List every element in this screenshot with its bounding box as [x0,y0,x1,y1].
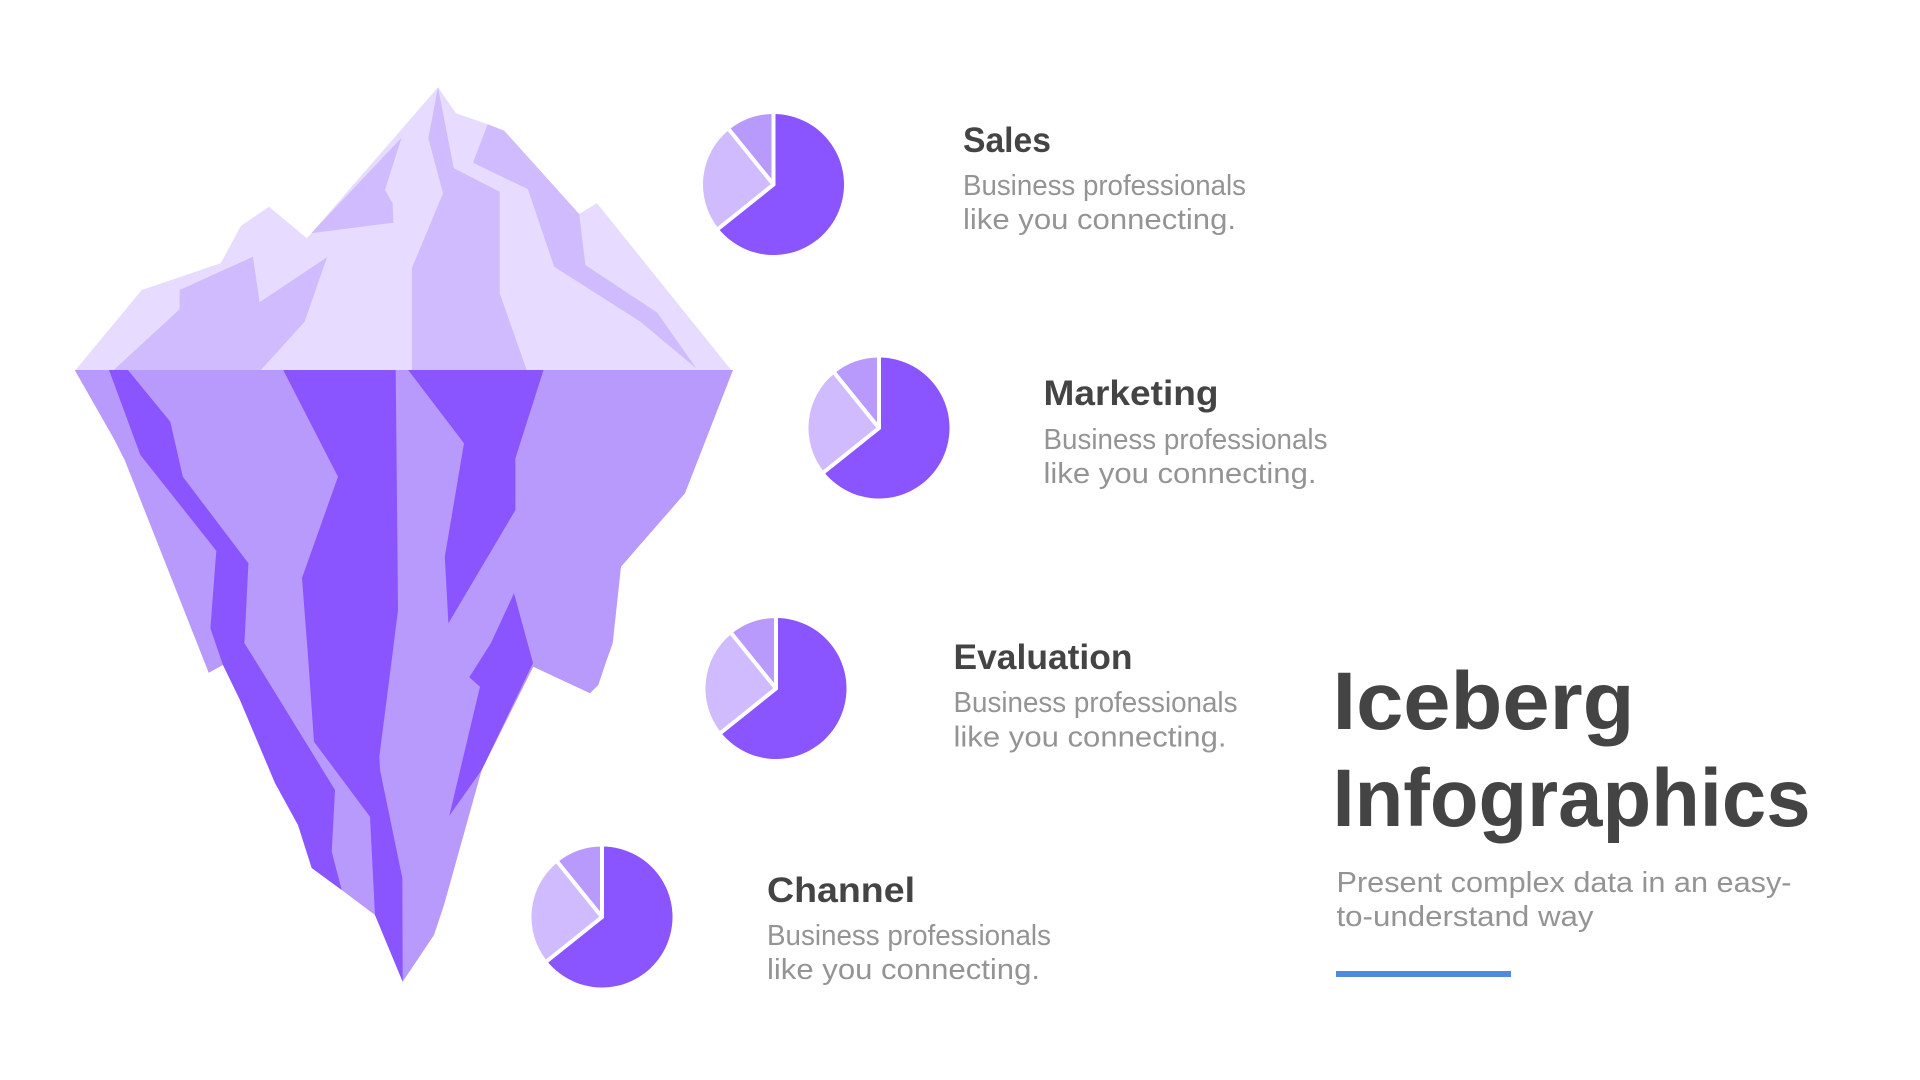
text block: Sales: like you connecting. [963,204,1236,236]
pie chart: Evaluation [705,616,847,759]
iceberg mass below water [75,370,733,982]
text block: Marketing: Business professionals [1044,424,1328,456]
title: Iceberg [1332,656,1634,747]
text block: Sales: Business professionals [963,170,1246,202]
title [1332,656,1810,844]
text block: Marketing: like you connecting. [1044,458,1316,490]
text block: Marketing: Marketing [1044,374,1218,413]
text block: Channel: Business professionals [767,920,1051,952]
pie chart: Channel [531,845,673,988]
text block: Sales: Sales [963,121,1051,160]
text block: Marketing [1044,374,1328,490]
text block: Evaluation: Business professionals [954,687,1238,719]
text block: Channel [767,871,1051,986]
text block: Evaluation: Evaluation [954,638,1132,677]
text block: Sales [963,121,1246,236]
text block: Evaluation [954,638,1238,754]
iceberg tip above water [75,87,732,371]
accent bar [1336,971,1511,977]
title: Infographics [1332,753,1810,844]
text block: Channel: like you connecting. [767,954,1040,986]
subtitle: to-understand way [1336,901,1594,933]
text block: Channel: Channel [767,871,915,910]
text block: Evaluation: like you connecting. [954,722,1226,754]
pie chart: Sales [703,112,844,255]
illustration: iceberg [75,87,733,982]
pie chart: Marketing [808,356,950,498]
subtitle [1336,867,1792,933]
subtitle: Present complex data in an easy- [1336,867,1792,899]
